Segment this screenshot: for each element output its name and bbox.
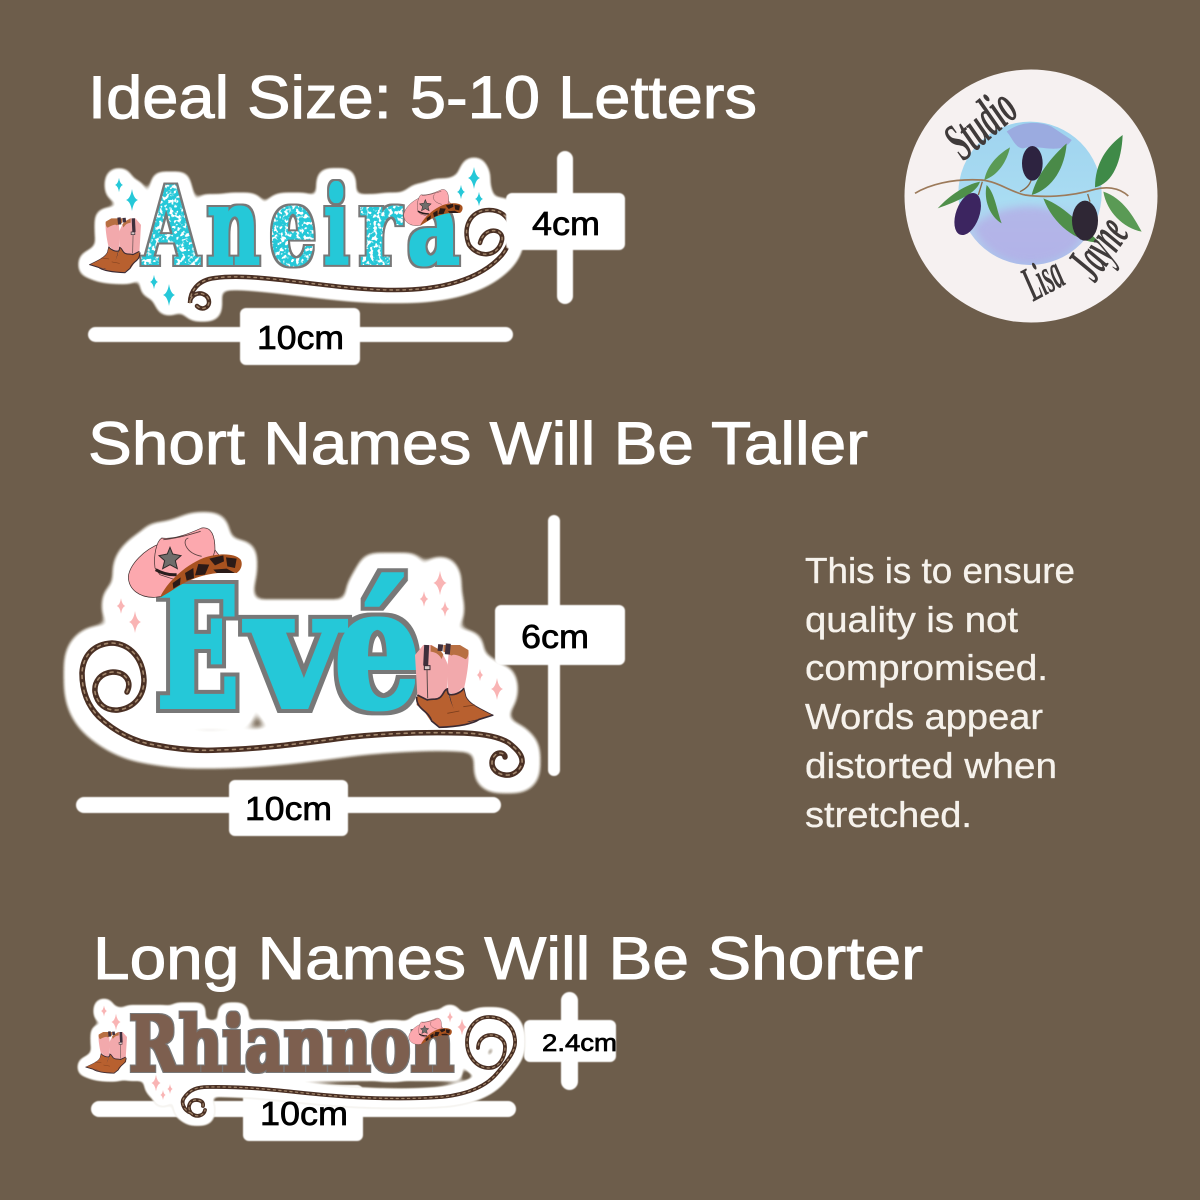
name letters: Evé: E: [157, 552, 239, 747]
rope lasso: [82, 643, 522, 775]
logo: Studio Lisa Jayne: [904, 70, 1158, 322]
text block: explanation: stretched.: [805, 794, 972, 835]
sparkles: [101, 1006, 466, 1100]
name letters: Aneira: r: [359, 164, 403, 290]
heading: short names: Short Names Will Be Taller: [88, 410, 868, 477]
ruler: 10cm width: [76, 780, 501, 836]
name letters: Aneira: [142, 164, 460, 290]
logo: Studio Lisa Jayne: Jayne: [1055, 205, 1140, 291]
name letters: Aneira: n: [207, 164, 260, 290]
text block: explanation: compromised.: [805, 647, 1048, 688]
text block: explanation: [805, 550, 1075, 835]
name letters: Aneira: a: [407, 164, 460, 290]
name letters: Evé: v: [244, 552, 346, 747]
heading: long names: Long Names Will Be Shorter: [93, 925, 923, 992]
icon: cowboy hat: [409, 1018, 452, 1044]
text block: explanation: Words appear: [805, 696, 1043, 737]
ruler: 6cm height: 6cm: [521, 618, 589, 655]
sticker: Aneira: [89, 164, 511, 308]
ruler: 4cm height: [506, 151, 625, 304]
name letters: Aneira: i: [324, 164, 349, 290]
ruler: 2.4cm height: 2.4cm: [542, 1030, 617, 1057]
name letters: Evé: é: [334, 552, 421, 747]
name letters: Rhiannon: Rhiannon: [129, 1000, 454, 1090]
ruler: 10cm width: [88, 308, 513, 365]
sparkles: [117, 571, 503, 700]
logo: Studio Lisa Jayne: Studio: [932, 76, 1028, 171]
icon: cowboy hat: [404, 189, 463, 226]
text block: explanation: distorted when: [805, 745, 1057, 786]
rope lasso: [190, 210, 511, 308]
name letters: Aneira: e: [270, 164, 316, 290]
name letters: Evé: [157, 552, 421, 747]
ruler: 4cm height: 4cm: [532, 205, 600, 242]
rope lasso: [183, 1017, 515, 1116]
ruler: 10cm width: [91, 1085, 516, 1141]
text block: explanation: This is to ensure: [805, 550, 1075, 591]
heading: ideal size: Ideal Size: 5-10 Letters: [88, 64, 757, 131]
sticker: Evé: [82, 528, 522, 775]
logo: Studio Lisa Jayne: Lisa: [1012, 244, 1072, 312]
ruler: 10cm width: 10cm: [257, 319, 344, 356]
name letters: Aneira: A: [142, 164, 200, 290]
icon: boots: [415, 644, 493, 727]
label: 10cm: 10cm: [260, 1095, 348, 1132]
icon: boots: [85, 1031, 127, 1073]
text block: explanation: quality is not: [805, 599, 1018, 640]
sparkles: [115, 167, 483, 306]
ruler: 2.4cm height: [524, 992, 617, 1090]
ruler: 6cm height: [495, 515, 625, 776]
ruler: 10cm width: 10cm: [245, 790, 332, 827]
icon: cowboy hat: [128, 528, 242, 597]
icon: boots: [89, 217, 141, 273]
sticker: Rhiannon: [85, 1000, 515, 1116]
